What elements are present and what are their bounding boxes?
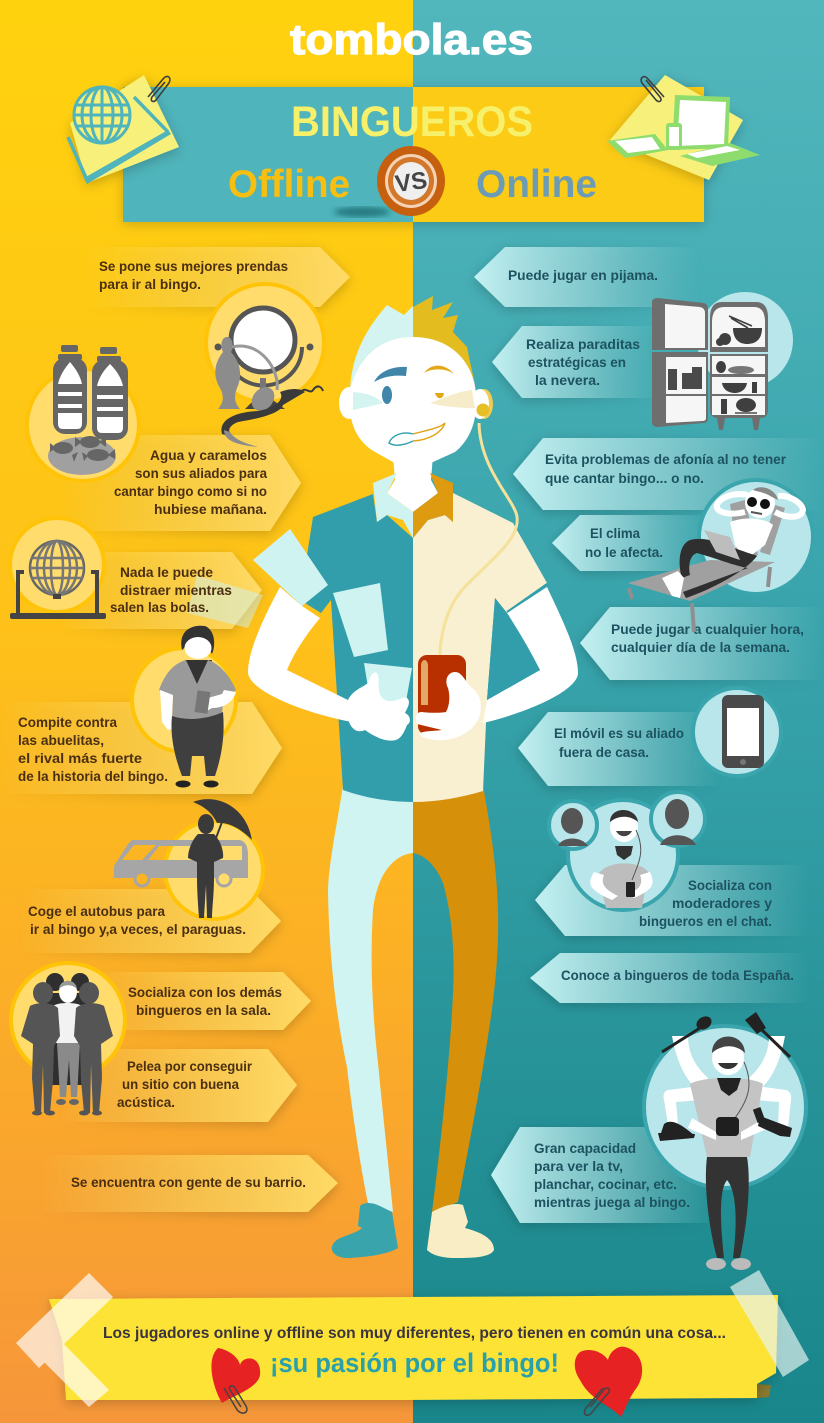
callout: gente de su barrio [40,1155,338,1212]
callout: el clima: no le afecta. [585,545,663,560]
callout: compite contra las abuelitas: Compite contra [18,715,117,730]
figure: red phone [418,655,466,735]
figure: left collar [373,473,413,538]
callout: el móvil [518,712,720,786]
right column: online bullets [474,247,824,1223]
figure: left sleeve [253,529,328,606]
icon: bingo cage [10,518,106,619]
figure: right collar [413,473,453,538]
callout: nada le puede distraer [60,552,263,629]
figure: left eyebrow [374,367,407,382]
callout: agua y caramelos [60,435,301,531]
callout: socializa en el chat: bingueros en el chat. [639,914,772,929]
figure: left ear [339,387,359,419]
callout: socializa en el chat [535,865,810,936]
figure: right arm [483,587,578,723]
banner: closing message: Los jugadores online y offline son muy diferentes, pero tienen en común una cosa... [103,1325,726,1342]
figure: right eyebrow [424,366,454,374]
icon: water bottles and candy plate [27,345,139,481]
callout: el móvil: El móvil es su aliado [554,726,684,741]
callout: pelea por un sitio: un sitio con buena [122,1077,239,1092]
icon: right heart [575,1347,642,1417]
callout: gente de su barrio: Se encuentra con gente de su barrio. [71,1175,306,1190]
callout: cualquier hora [580,607,824,680]
icon: smartphone [693,688,781,776]
icon: left heart paperclip [224,1386,247,1413]
callout: pelea por un sitio: Pelea por conseguir [127,1059,253,1074]
callout: toda España: Conoce a bingueros de toda España. [561,968,794,983]
figure: left hair [350,305,413,390]
callout text: coge el autobus: ir al bingo y,a veces, el paraguas. [30,922,246,937]
icon: multitasking player with many arms [644,1012,806,1270]
callout: mejores prendas: para ir al bingo. [99,277,201,292]
callout: nada le puede distraer: salen las bolas. [110,600,209,615]
callout: paraditas en la nevera [492,326,660,398]
figure: right hair [413,296,476,390]
icon: mirror and perfume [206,284,324,447]
figure: mouth right half [413,423,445,441]
callout: gran capacidad [491,1127,720,1223]
callout: socializa en la sala: Socializa con los demás [128,985,282,1000]
icon: right paperclip [641,77,664,101]
figure: inner right shirt shadow [487,598,540,700]
callout: agua y caramelos: son sus aliados para [135,466,267,481]
figure: shirt right half [413,493,547,802]
callout: paraditas en la nevera: la nevera. [535,373,600,388]
icon: VS bingo ball: VS [393,167,429,198]
icon: sunbather with laptop [628,480,813,632]
icon: left paperclip [148,76,170,101]
figure: left leg [328,785,413,1212]
figure: left cheek [353,392,383,410]
figure: earphone wire [440,423,517,655]
heading: BINGUEROS: BINGUEROS [291,98,533,146]
callout: paraditas en la nevera: Realiza paraditas [526,337,640,352]
icon: bus and person with umbrella [114,799,263,919]
figure: half offline, half online player [248,296,578,1258]
figure: right ear with earphone [471,389,493,419]
figure: right eye [435,393,444,398]
callout: agua y caramelos: Agua y caramelos [150,448,267,463]
icon: bingo cage on note paper [68,75,179,184]
callout text: coge el autobus [28,904,246,937]
callout: agua y caramelos: hubiese mañana. [154,502,267,517]
callout: compite contra las abuelitas: el rival más fuerte [18,751,143,766]
callout: compite contra las abuelitas: las abuelitas, [18,733,104,748]
callout: pelea por un sitio [60,1049,297,1122]
callout: socializa en la sala: bingueros en la sala. [136,1003,271,1018]
icon: devices on note paper [607,75,760,180]
callout: afonía [513,438,824,510]
banner: closing message [49,1295,778,1400]
callout: gran capacidad: para ver la tv, [534,1159,623,1174]
header band [123,87,704,222]
tape strips [16,1270,809,1407]
icon: right heart paperclip [584,1388,609,1415]
heading: Offline: Offline [228,163,350,206]
callout: en pijama [474,247,700,307]
figure: shirt pocket card [333,583,388,657]
icon: chat group of players [549,792,705,910]
figure: right leg [413,785,498,1212]
callout: cualquier hora: cualquier día de la semana. [611,640,790,655]
callout: el móvil: fuera de casa. [559,745,649,760]
figure: shirt left half [300,494,413,802]
callout: el clima: El clima [590,526,640,541]
figure: right cheek [430,390,475,408]
figure: left hand [347,672,410,741]
figure: right shoe [427,1204,494,1258]
callout: pelea por un sitio: acústica. [117,1095,175,1110]
figure: right hand [416,672,481,740]
callout: mejores prendas: Se pone sus mejores prendas [99,259,288,274]
logo: tombola.es: tombola.es [290,16,533,64]
figure: left shoe [332,1203,398,1258]
callout: coge el autobus shape [20,889,281,953]
figure: card in hand [364,663,412,707]
callout: compite contra las abuelitas [0,702,282,794]
callout: paraditas en la nevera: estratégicas en [528,355,626,370]
callout: gran capacidad: Gran capacidad [534,1141,636,1156]
icon: group of players [11,963,125,1116]
callout: compite contra las abuelitas: de la historia del bingo. [18,769,168,784]
banner: closing message: ¡su pasión por el bingo! [270,1348,559,1378]
callout: afonía: que cantar bingo... o no. [545,471,704,486]
figure: neck [387,455,438,512]
callout: socializa en el chat: Socializa con [688,878,772,893]
callout: mejores prendas [85,247,350,307]
callout: gran capacidad: planchar, cocinar, etc. [534,1177,677,1192]
callout: nada le puede distraer: Nada le puede [120,565,213,580]
icon: grandmother [132,626,236,788]
callout: toda España [530,953,810,1003]
icon: open fridge [652,292,793,430]
callout: gran capacidad: mientras juega al bingo. [534,1195,690,1210]
callout: el clima [552,515,710,571]
callout: nada le puede distraer: distraer mientras [120,583,232,598]
figure: left eye [382,386,392,404]
callout: socializa en el chat: moderadores y [672,896,772,911]
icon: left heart [211,1348,260,1403]
callout: agua y caramelos: cantar bingo como si no [114,484,267,499]
icon: VS bingo ball [334,146,445,217]
figure: mouth left half [389,433,413,445]
figure: head [350,335,476,466]
callout text: coge el autobus: Coge el autobus para [28,904,165,919]
callout: socializa en la sala [90,972,311,1030]
figure: left arm [248,587,352,722]
left column: offline bullets [0,247,350,1212]
callout: afonía: Evita problemas de afonía al no tener [545,452,787,467]
callout: cualquier hora: Puede jugar a cualquier hora, [611,622,804,637]
callout: en pijama: Puede jugar en pijama. [508,268,658,283]
heading: Online: Online [476,163,597,206]
